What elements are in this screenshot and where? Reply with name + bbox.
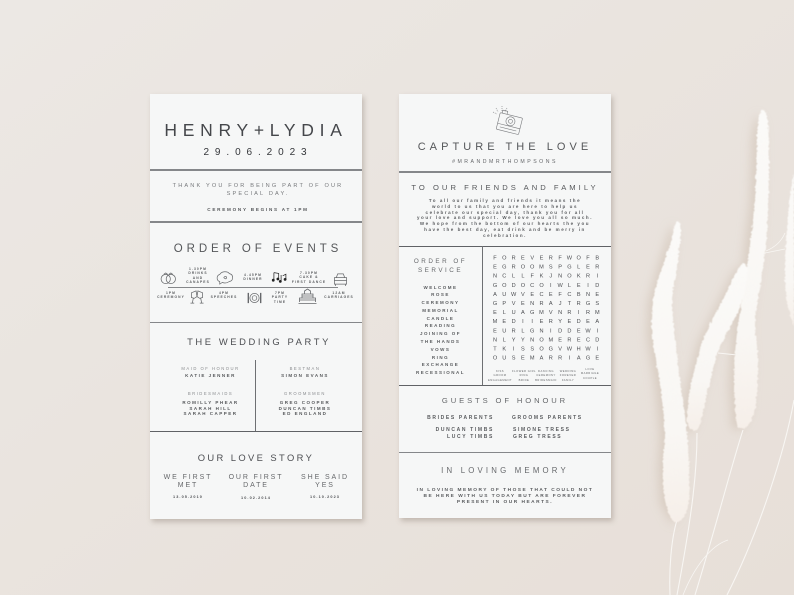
word search grid: MEDIIERYEDEA	[493, 319, 599, 325]
words column 2: FLOWER GIRL	[512, 370, 536, 373]
timeline line	[168, 287, 338, 288]
groomsmen: GROOMSMEN	[284, 391, 326, 396]
label: ceremony: CEREMONY	[157, 295, 185, 299]
order of service list: EXCHANGE	[422, 362, 459, 367]
title: couple names: HENRY+LYDIA	[164, 120, 348, 140]
divider	[150, 221, 362, 223]
word search grid: AUWVECEFCBNE	[493, 292, 599, 298]
bridesmaids names	[182, 400, 239, 416]
label: speeches: SPEECHES	[211, 295, 237, 299]
card: wedding programme back	[399, 94, 611, 518]
bridesmaids names: SARAH CAPPER	[183, 411, 238, 416]
heading: our love story: OUR LOVE STORY	[198, 452, 314, 463]
divider	[399, 171, 611, 173]
words column 3	[535, 370, 557, 382]
story: she said yes: SHE SAID	[301, 474, 349, 481]
thank you message	[172, 183, 343, 197]
label: carriages: 12AM	[332, 291, 346, 295]
words column 3: BRIDESMAID	[535, 379, 557, 382]
memorial message	[416, 488, 593, 505]
brides parents: LUCY TIMBS	[447, 434, 494, 440]
word search grid: FOREVERFWOFB	[493, 256, 599, 262]
crossing plume	[687, 263, 748, 431]
label: drinks and canapes: AND	[193, 276, 203, 280]
order of service list: CEREMONY	[421, 300, 460, 305]
maid of honour: MAID OF HONOUR	[181, 366, 240, 371]
label: speeches	[210, 291, 237, 299]
order of service list	[416, 284, 465, 375]
bridesmaids: BRIDESMAIDS	[188, 391, 233, 396]
words column 4: FOREVER	[560, 374, 576, 377]
words column 1: KISS	[496, 370, 504, 373]
story: our first date: DATE	[243, 482, 269, 489]
icon: wedding cake	[298, 288, 316, 304]
bestman name: SIMON EVANS	[281, 373, 329, 378]
divider	[399, 452, 611, 453]
words column 3: CEREMONY	[536, 374, 556, 377]
words column 1: GROOM	[494, 374, 506, 377]
order of service list: RING	[432, 355, 449, 360]
words column 2: RING	[520, 374, 528, 377]
word search grid	[493, 256, 600, 361]
bride's side of party	[181, 366, 240, 416]
message to guests: have the best day, eat drink and be merry in	[424, 227, 586, 232]
label: carriages: CARRIAGES	[324, 295, 354, 299]
label: speeches: 4PM	[219, 291, 229, 295]
memorial message: IN LOVING MEMORY OF THOSE THAT COULD NOT	[417, 488, 593, 493]
memorial message: BE HERE WITH US TODAY BUT ARE FOREVER	[424, 494, 586, 499]
thank you message: SPECIAL DAY.	[227, 191, 289, 197]
words column 1: ENGAGEMENT	[488, 379, 512, 382]
divider	[150, 431, 362, 432]
label: carriages	[324, 291, 354, 299]
order of service list: MEMORIAL	[422, 308, 459, 313]
story: our first date: OUR FIRST	[229, 474, 283, 481]
words column 4: WEDDING	[560, 370, 576, 373]
heading: order of service	[414, 258, 467, 274]
heading: order of events: ORDER OF EVENTS	[174, 243, 342, 255]
label: ceremony	[157, 291, 185, 299]
icon: speech bubble	[216, 271, 233, 285]
order of service list: READING	[425, 323, 456, 328]
grooms parents	[512, 415, 583, 440]
label: party time: TIME	[274, 300, 286, 304]
story: our first date	[229, 474, 283, 489]
heading: order of service: ORDER OF	[414, 258, 467, 265]
hashtag: #MRANDMRTHOMPSONS	[452, 159, 558, 165]
message to guests: your love and support. We love you all so much.	[417, 215, 593, 220]
words column 5: LOVE	[585, 368, 595, 371]
word search grid: ELUAGMVNRIRM	[493, 310, 600, 316]
word search grid: NCLLFKJNOKRI	[493, 274, 599, 280]
edge plume	[785, 173, 794, 327]
order of service list: JOINING OF	[420, 331, 461, 336]
word search grid: NLYYNOMERECD	[493, 337, 599, 343]
order of service list: CANDLE	[427, 316, 454, 321]
word search grid: GODOCOIWLEID	[493, 283, 599, 289]
icon: carriage car	[334, 274, 347, 286]
icon: wedding rings	[160, 272, 176, 284]
words column 1	[488, 370, 512, 382]
bridesmaids names: SARAH HILL	[189, 406, 232, 410]
grooms parents: SIMONE TRESS	[513, 427, 571, 433]
label: drinks and canapes: DRINKS	[188, 271, 208, 275]
brides parents: BRIDES PARENTS	[427, 415, 494, 421]
label: dinner	[243, 273, 263, 281]
words column 5	[581, 368, 599, 380]
word search word list	[488, 368, 599, 382]
order of service list: VOWS	[431, 347, 450, 352]
left plume	[652, 221, 689, 522]
words column 2: BRIDE	[519, 379, 529, 382]
groomsmen names: DUNCAN TIMBS	[279, 406, 331, 410]
word search grid: TKISSOGVWHWI	[493, 346, 599, 352]
word search grid: EGROOMSPGLER	[493, 265, 599, 271]
word search grid: GPVENRAJTRGS	[493, 301, 599, 307]
message to guests	[417, 198, 593, 238]
memorial message: PRESENT IN OUR HEARTS.	[457, 500, 553, 505]
grooms parents: GREG TRESS	[513, 434, 562, 440]
label: cake and first dance	[292, 271, 326, 284]
date: first met: 13.05.2010	[173, 495, 203, 499]
story: we first met: MET	[178, 482, 198, 489]
tall plume	[734, 110, 769, 428]
wedding date: 29.06.2023	[203, 147, 313, 158]
groomsmen names: GREG COOPER	[280, 400, 330, 405]
order of service list: RECESSIONAL	[416, 370, 465, 375]
label: dinner: DINNER	[243, 277, 263, 281]
words column 2	[512, 370, 536, 382]
label: cake and first dance: CAKE &	[299, 275, 319, 279]
date: first date: 10.02.2014	[241, 496, 271, 500]
groom's side of party	[278, 366, 331, 416]
order of service list: WELCOME	[424, 284, 458, 290]
words column 4	[560, 370, 576, 382]
story: we first met: WE FIRST	[164, 474, 212, 481]
message to guests: We hope from the bottom of our hearts the you	[420, 221, 590, 226]
label: party time: PARTY	[272, 295, 288, 299]
card: wedding programme front	[150, 94, 362, 519]
maid of honour name: KATIE JENNER	[185, 373, 236, 378]
label: cake and first dance: 7.30PM	[300, 271, 318, 275]
message to guests: celebration.	[483, 233, 527, 238]
groomsmen names: ED ENGLAND	[283, 411, 327, 416]
label: drinks and canapes: CANAPES	[186, 280, 210, 284]
divider	[150, 322, 362, 323]
heading: order of service: SERVICE	[418, 267, 463, 274]
groomsmen names	[278, 400, 331, 416]
label: dinner: 4.45PM	[244, 273, 262, 277]
heading: in loving memory: IN LOVING MEMORY	[441, 466, 569, 475]
order of service list: ROSE	[431, 292, 450, 297]
order of service list: THE HANDS	[421, 339, 460, 344]
heading: to our friends and family: TO OUR FRIENDS AND FAMILY	[411, 183, 599, 192]
message to guests: celebrate our special day, thank you for all	[426, 210, 584, 215]
label: party time	[272, 291, 288, 304]
icon: music notes	[272, 272, 286, 283]
label: drinks and canapes	[186, 267, 210, 284]
label: drinks and canapes: 1.30PM	[189, 267, 207, 271]
heading: capture the love: CAPTURE THE LOVE	[418, 141, 592, 153]
message to guests: To all our family and friends it means the	[429, 198, 581, 203]
words column 5: COUPLE	[583, 377, 597, 380]
words column 4: FAMILY	[562, 379, 574, 382]
heading: guests of honour: GUESTS OF HONOUR	[442, 396, 568, 405]
words column 5: MARRIAGE	[581, 372, 599, 375]
party divider	[255, 360, 256, 431]
thank you message: THANK YOU FOR BEING PART OF OUR	[173, 183, 343, 189]
divider	[150, 169, 362, 171]
bestman: BESTMAN	[290, 366, 320, 371]
label: ceremony: 1PM	[166, 291, 176, 295]
date: she said yes: 10.10.2023	[310, 495, 340, 499]
label: cake and first dance: FIRST DANCE	[292, 280, 326, 284]
grooms parents: GROOMS PARENTS	[512, 415, 583, 421]
icon: instant camera	[492, 106, 523, 135]
ceremony time: CEREMONY BEGINS AT 1PM	[207, 207, 309, 212]
icon: champagne glasses	[190, 290, 204, 304]
story: she said yes	[301, 474, 349, 489]
word search grid: EURLGNIDDEWI	[493, 328, 599, 334]
brides parents: DUNCAN TIMBS	[436, 427, 494, 433]
story: she said yes: YES	[315, 482, 335, 489]
divider	[399, 246, 611, 247]
icon: plate and cutlery	[248, 292, 262, 304]
words column 3: DANCING	[538, 370, 554, 373]
bridesmaids names: ROMILLY PHEAR	[182, 400, 239, 405]
message to guests: world to us that you are here to help us	[432, 204, 578, 209]
divider	[399, 384, 611, 386]
heading: the wedding party: THE WEDDING PARTY	[187, 336, 331, 347]
story: we first met	[164, 474, 212, 489]
timeline of events	[157, 267, 354, 304]
brides parents	[427, 415, 494, 440]
panel divider	[482, 246, 483, 385]
label: party time: 7PM	[275, 291, 285, 295]
